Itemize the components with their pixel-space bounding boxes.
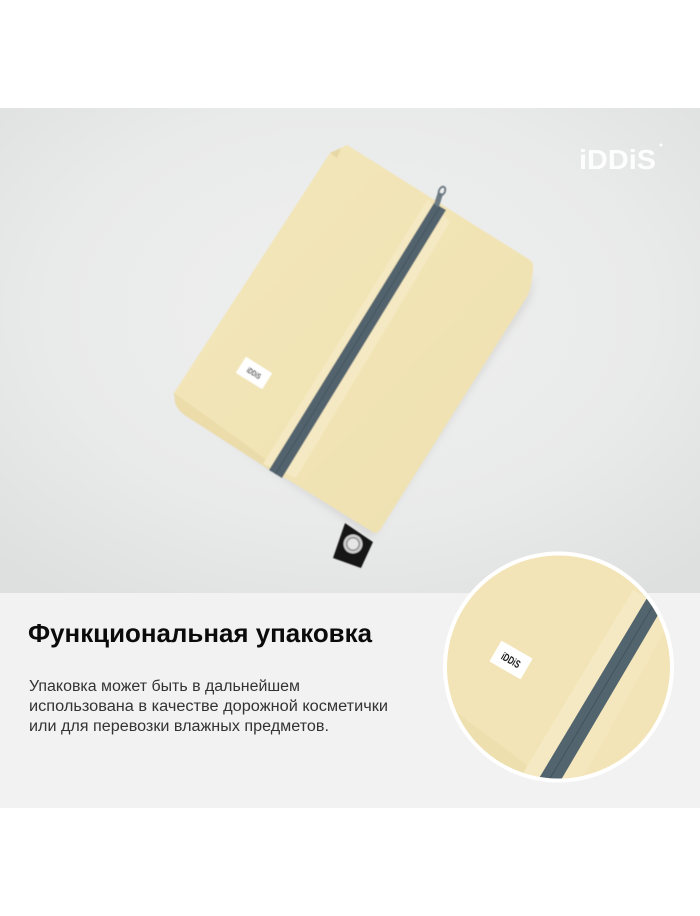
label in circle: iDDiS [499,651,522,671]
zipper tape [269,203,446,478]
fold shading [174,393,270,470]
piping and zipper in circle [523,590,648,785]
pouch shadow [176,275,535,538]
fabric label [236,357,272,389]
label in circle [489,641,533,679]
loop tab with eyelet [333,523,373,568]
product: yellow pouch [170,145,535,568]
photo background [0,108,700,594]
description: Упаковка может быть в дальнейшем [29,678,300,695]
heading: Функциональная упаковка [28,618,373,648]
brand logo: iDDiS [579,144,656,175]
zipper pull [434,186,447,207]
detail circle: zoomed view [440,550,680,790]
pouch body [174,145,533,533]
description [29,678,388,735]
zipper piping [263,199,450,478]
description: или для перевозки влажных предметов. [29,718,329,735]
fabric label: iDDiS [245,366,263,381]
text panel background [0,593,700,808]
description: использована в качестве дорожной косметички [29,698,388,715]
